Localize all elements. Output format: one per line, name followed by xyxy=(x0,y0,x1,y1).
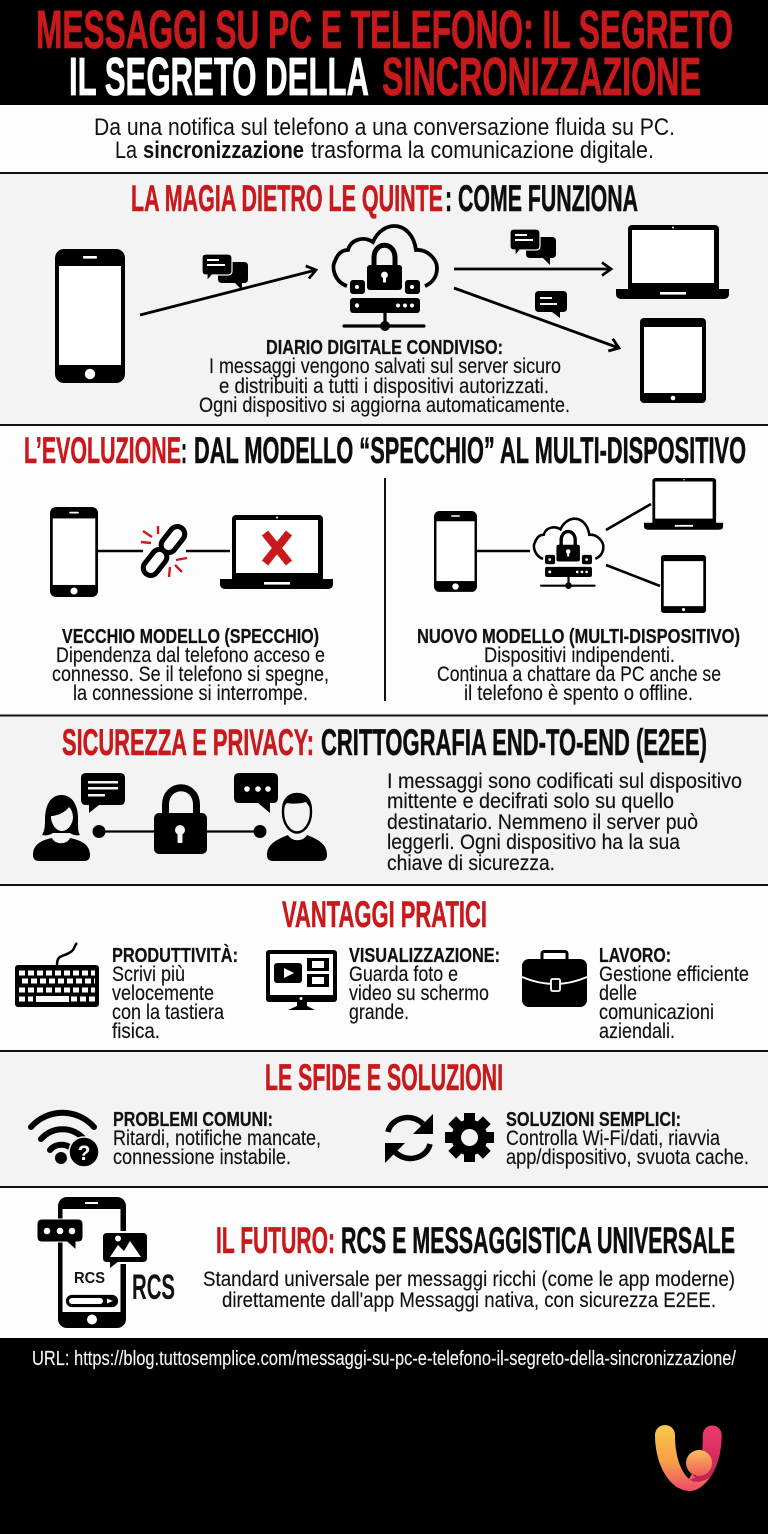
text: crittografia: I messaggi sono codificati sul dispositivo xyxy=(387,770,742,793)
text: soluzioni semplici xyxy=(506,1109,749,1169)
icon: keyboard xyxy=(15,943,99,1007)
heading: la magia dietro le quinte: LA MAGIA DIETRO LE QUINTE xyxy=(131,178,443,219)
heading: evoluzione: L’EVOLUZIONE xyxy=(24,430,181,471)
text: produttivita: con la tastiera xyxy=(112,1001,224,1024)
text: vecchio modello: Dipendenza dal telefono acceso e xyxy=(56,644,325,667)
text: lavoro: delle xyxy=(599,982,637,1005)
text: soluzioni semplici: SOLUZIONI SEMPLICI: xyxy=(506,1109,681,1131)
icon: bubble with lines xyxy=(81,773,125,813)
text: vecchio modello: VECCHIO MODELLO (SPECCHIO) xyxy=(62,626,319,648)
text: visualizzazione: video su schermo xyxy=(349,982,489,1005)
heading: sicurezza: SICUREZZA E PRIVACY: xyxy=(62,722,314,763)
icon: bubble with dots xyxy=(234,773,278,813)
connector right xyxy=(477,504,660,586)
text: lavoro: comunicazioni xyxy=(599,1001,714,1024)
text: visualizzazione: VISUALIZZAZIONE: xyxy=(349,945,500,967)
intro text: La xyxy=(115,137,138,164)
divider xyxy=(384,478,386,701)
icon: gear xyxy=(445,1113,494,1162)
panel: sicurezza e privacy xyxy=(0,714,768,885)
text: nuovo modello xyxy=(417,626,740,705)
heading: evoluzione: : xyxy=(181,430,187,471)
icon: laptop with red x xyxy=(220,515,333,589)
text: produttivita: PRODUTTIVITÀ: xyxy=(112,944,238,967)
text: produttivita: fisica. xyxy=(112,1020,160,1043)
text: crittografia: leggerli. Ogni dispositivo ha la sua xyxy=(387,831,680,854)
heading: sicurezza xyxy=(62,722,707,763)
text: problemi comuni xyxy=(113,1109,321,1169)
text: standard universale: direttamente dall'app Messaggi nativa, con sicurezza E2EE. xyxy=(222,1289,716,1312)
arrow: cloud to laptop xyxy=(454,268,611,270)
text: vecchio modello xyxy=(52,626,329,705)
title line 2: IL SEGRETO DELLA xyxy=(69,47,369,107)
bubble with dots xyxy=(37,1219,83,1250)
text: diario digitale condiviso: Ogni dispositivo si aggiorna automaticamente. xyxy=(199,394,570,417)
icon: broken chain link xyxy=(140,524,188,578)
text: nuovo modello: Continua a chattare da PC anche se xyxy=(437,663,721,686)
icon: new model phone xyxy=(434,511,477,592)
text: problemi comuni: PROBLEMI COMUNI: xyxy=(113,1109,273,1131)
intro panel xyxy=(0,105,768,173)
rcs label: RCS xyxy=(74,1270,105,1287)
icon: secure cloud server xyxy=(334,226,437,331)
panel: il futuro xyxy=(0,1186,768,1338)
bubble with picture xyxy=(102,1232,148,1270)
icon: rcs phone xyxy=(37,1197,148,1328)
icon: single chat bubble xyxy=(535,291,567,318)
icon: small tablet xyxy=(661,555,706,613)
text: produttivita xyxy=(112,944,238,1043)
heading: vantaggi pratici: VANTAGGI PRATICI xyxy=(282,894,487,935)
icon: laptop xyxy=(616,225,729,299)
intro text: sincronizzazione xyxy=(143,137,304,164)
icon: briefcase xyxy=(522,952,587,1007)
icon: monitor with video xyxy=(266,950,337,1010)
text: problemi comuni: Ritardi, notifiche mancate, xyxy=(113,1127,321,1150)
text: soluzioni semplici: Controlla Wi-Fi/dati, riavvia xyxy=(506,1127,720,1150)
icon: tablet xyxy=(640,318,706,403)
arrow: cloud to tablet xyxy=(454,288,619,348)
text: visualizzazione: Guarda foto e xyxy=(349,963,458,986)
text: crittografia: destinatario. Nemmeno il server può xyxy=(387,811,698,834)
icon: chat bubbles xyxy=(202,254,248,290)
panel: evoluzione xyxy=(0,424,768,716)
text: visualizzazione xyxy=(349,945,500,1024)
text: diario digitale condiviso xyxy=(199,337,570,417)
connector left xyxy=(98,550,230,552)
icon: man xyxy=(267,793,327,861)
icon: wifi with question mark xyxy=(31,1113,99,1167)
input pill xyxy=(67,1296,117,1306)
panel: sfide e soluzioni xyxy=(0,1050,768,1187)
icon: small laptop xyxy=(644,478,723,530)
panel: vantaggi pratici xyxy=(0,884,768,1051)
icon: refresh arrows xyxy=(385,1114,433,1163)
icon: small cloud xyxy=(534,519,603,589)
text: lavoro xyxy=(599,945,749,1043)
text: standard universale xyxy=(203,1268,735,1312)
heading: il futuro: IL FUTURO: xyxy=(216,1220,335,1261)
large rcs label: RCS xyxy=(132,1268,175,1307)
icon: old model phone xyxy=(50,507,98,597)
panel: come funziona xyxy=(0,172,768,425)
intro text: trasforma la comunicazione digitale. xyxy=(311,137,654,164)
icon: padlock xyxy=(154,788,207,854)
title banner xyxy=(0,0,768,107)
text: problemi comuni: connessione instabile. xyxy=(113,1146,291,1169)
text: lavoro: Gestione efficiente xyxy=(599,963,749,986)
text: visualizzazione: grande. xyxy=(349,1001,409,1024)
text: diario digitale condiviso: e distribuiti a tutti i dispositivi autorizzati. xyxy=(219,375,549,398)
text: crittografia: mittente e decifrati solo su quello xyxy=(387,790,674,813)
text: crittografia: chiave di sicurezza. xyxy=(387,852,555,875)
text: crittografia xyxy=(387,770,742,875)
heading: sfide: LE SFIDE E SOLUZIONI xyxy=(265,1057,503,1098)
icon: woman xyxy=(33,795,90,861)
text: vecchio modello: la connessione si interrompe. xyxy=(73,682,308,705)
text: vecchio modello: connesso. Se il telefono si spegne, xyxy=(52,663,329,686)
intro text: Da una notifica sul telefono a una conversazione fluida su PC. xyxy=(94,114,675,141)
text: nuovo modello: Dispositivi indipendenti. xyxy=(484,644,675,667)
text: nuovo modello: il telefono è spento o offline. xyxy=(464,682,693,705)
icon: phone xyxy=(55,249,125,383)
connector with nodes xyxy=(92,825,266,838)
arrow: phone to cloud xyxy=(140,270,316,315)
icon: wifi with question mark: ? xyxy=(78,1142,90,1165)
text: lavoro: aziendali. xyxy=(599,1020,675,1043)
intro text xyxy=(94,114,675,164)
icon: chat bubbles top xyxy=(510,229,556,265)
logo xyxy=(655,1425,722,1491)
text: produttivita: velocemente xyxy=(112,982,214,1005)
text: produttivita: Scrivi più xyxy=(112,963,185,986)
text: diario digitale condiviso: DIARIO DIGITALE CONDIVISO: xyxy=(266,337,503,359)
text: diario digitale condiviso: I messaggi vengono salvati sul server sicuro xyxy=(209,355,561,378)
text: lavoro: LAVORO: xyxy=(599,945,671,967)
